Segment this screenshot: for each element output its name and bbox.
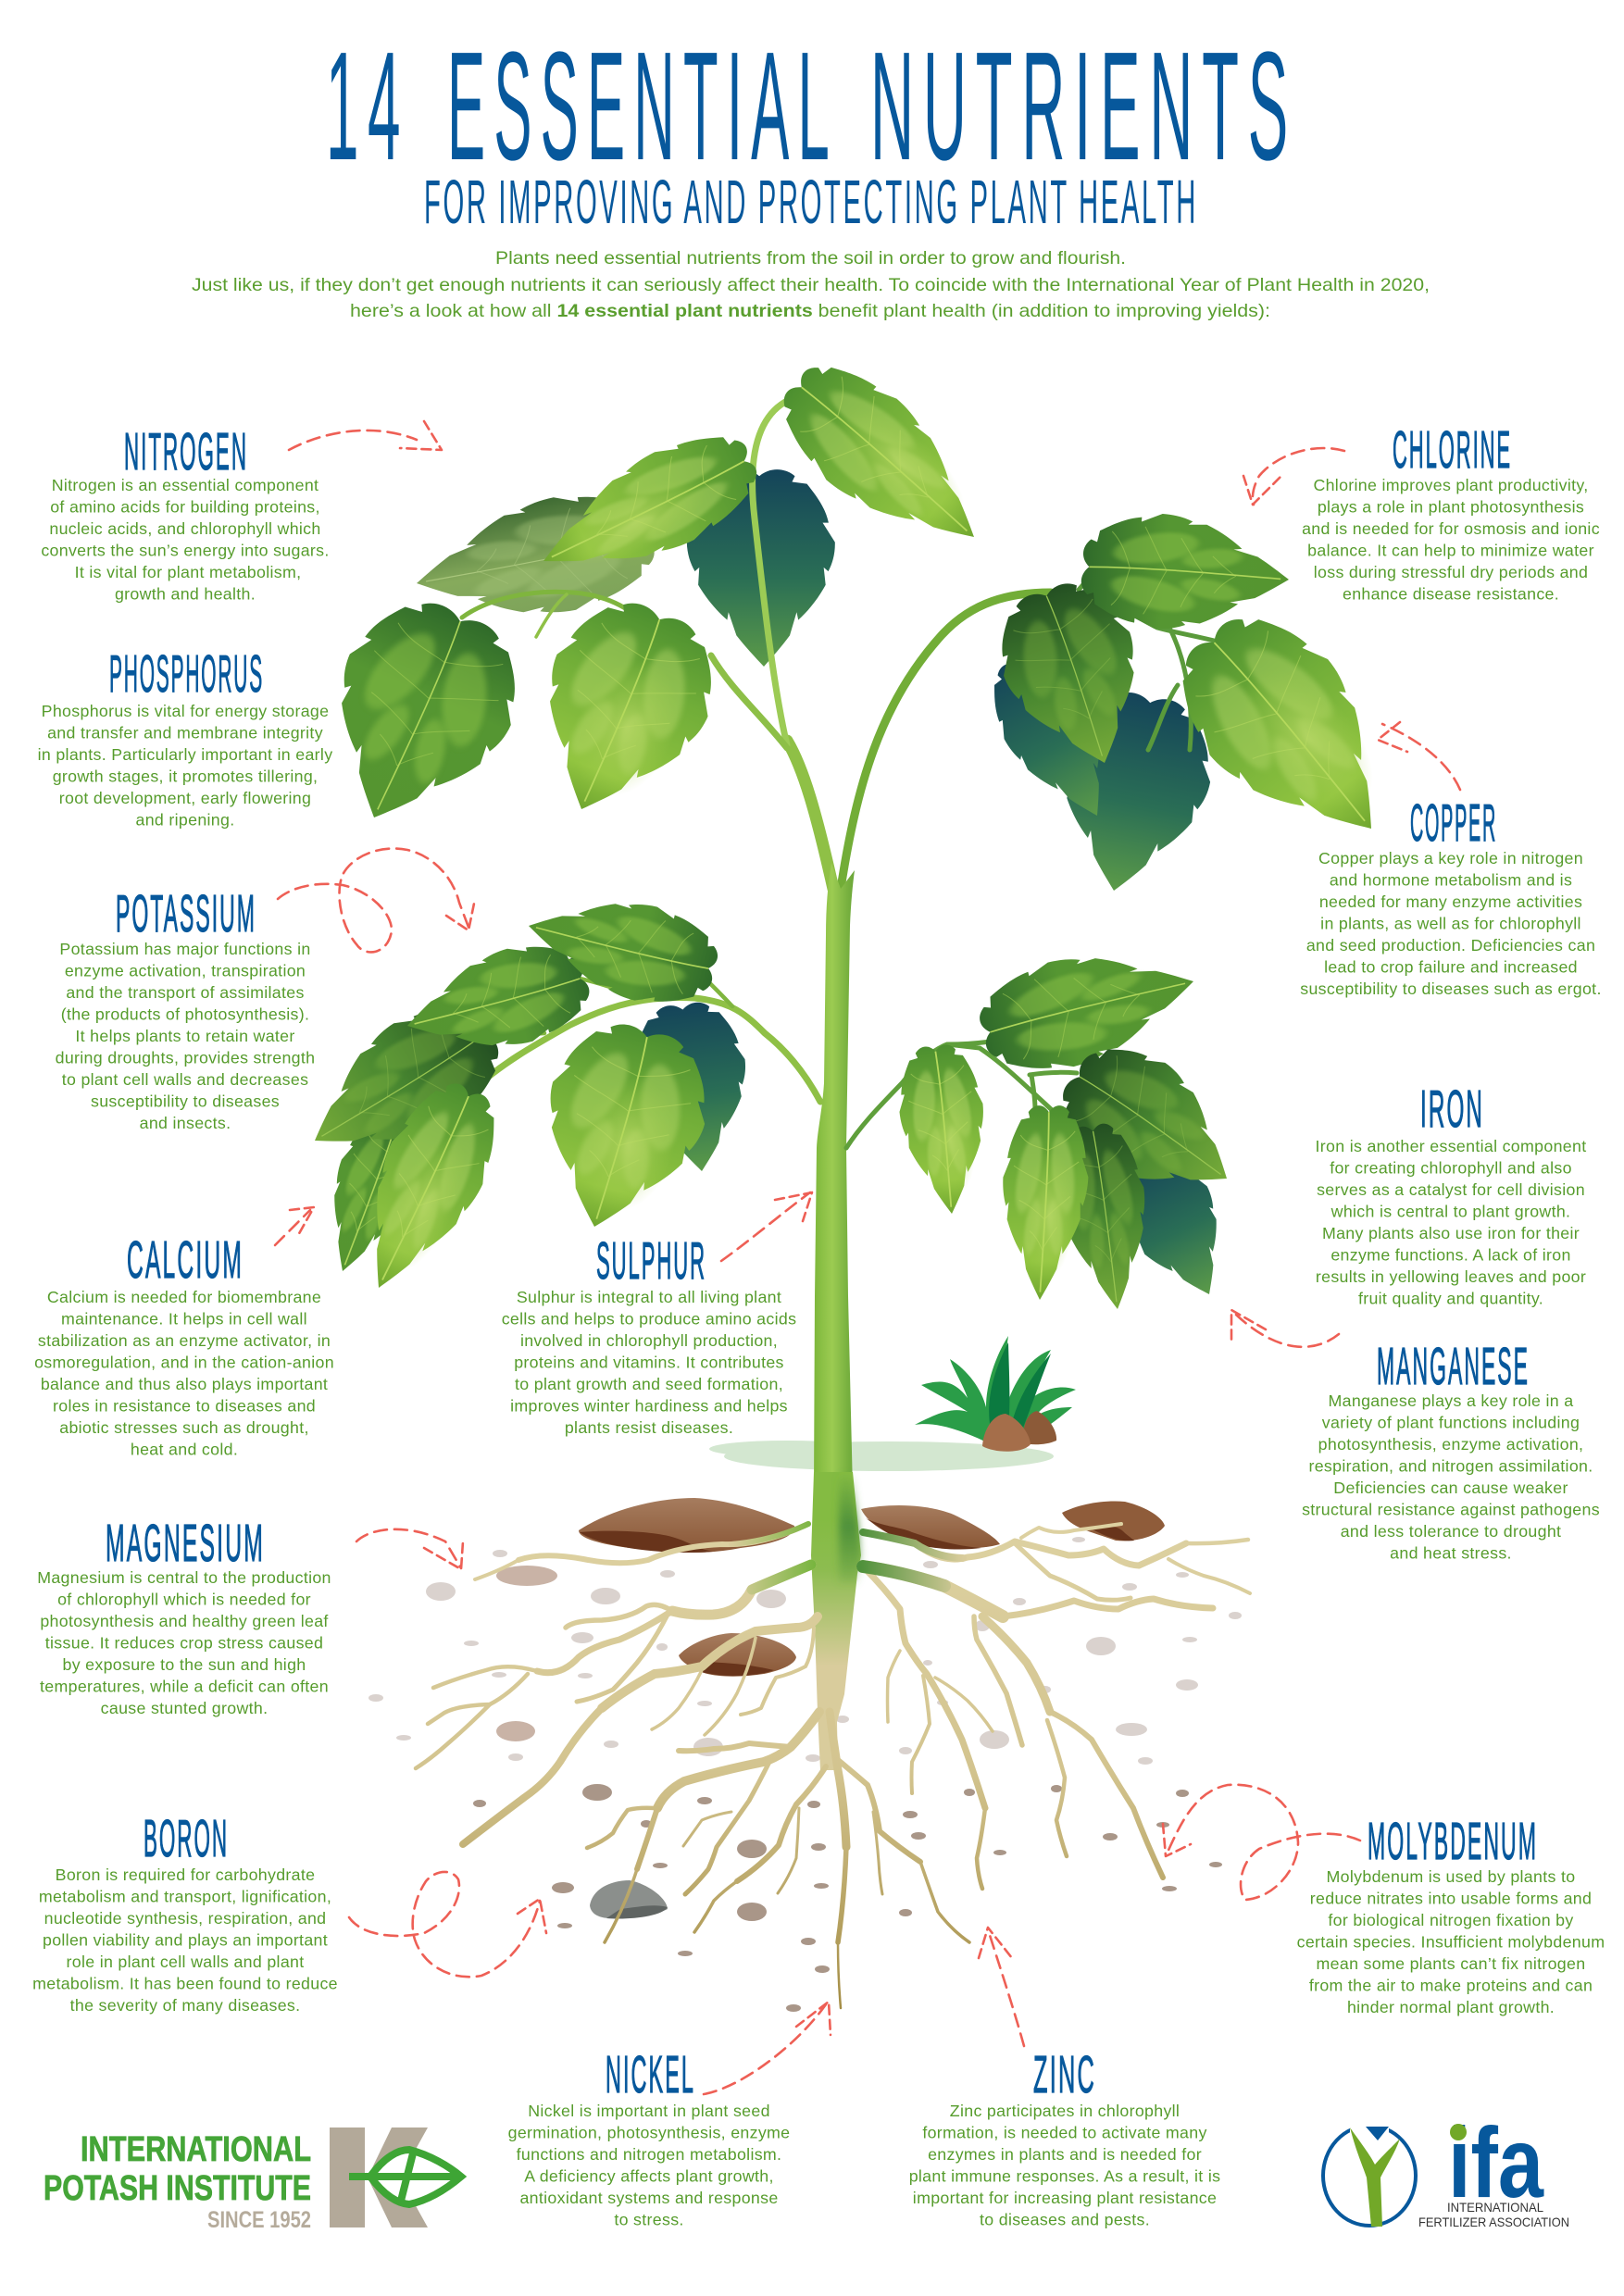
block: calcium: stabilization as an enzyme activator, in	[38, 1331, 331, 1350]
block: manganese: variety of plant functions including	[1322, 1413, 1580, 1431]
arrow: magnesium	[356, 1529, 463, 1569]
block: potassium: and the transport of assimilates	[66, 983, 305, 1002]
block: copper: needed for many enzyme activities	[1319, 892, 1582, 911]
block: potassium: POTASSIUM	[116, 884, 256, 943]
block: zinc	[909, 2045, 1220, 2229]
block: zinc: plant immune responses. As a result, it is	[909, 2166, 1220, 2185]
block: boron: metabolism and transport, lignification,	[39, 1887, 331, 1905]
block: molybdenum: from the air to make proteins and can	[1309, 1976, 1593, 1994]
block: magnesium: tissue. It reduces crop stress caused	[45, 1633, 323, 1652]
block: boron: role in plant cell walls and plant	[67, 1953, 304, 1971]
block: nickel: to stress.	[614, 2211, 684, 2229]
block: potassium	[56, 884, 315, 1132]
main stem	[814, 863, 855, 1491]
block: sulphur: to plant growth and seed formation,	[515, 1375, 783, 1393]
grey rock	[590, 1880, 668, 1918]
block: chlorine	[1302, 420, 1600, 604]
block: iron: which is central to plant growth.	[1330, 1202, 1570, 1220]
arrow: sulphur	[721, 1192, 812, 1261]
block: phosphorus: and ripening.	[136, 811, 234, 830]
logo: international fertilizer association: INTERNATIONAL	[1447, 2200, 1543, 2215]
block: boron: the severity of many diseases.	[70, 1996, 300, 2015]
back leaves upper	[406, 469, 1224, 905]
block: calcium: osmoregulation, and in the cation-anion	[34, 1354, 334, 1372]
block: calcium: balance and thus also plays important	[41, 1375, 328, 1393]
block: sulphur: Sulphur is integral to all living plant	[517, 1288, 781, 1306]
block: phosphorus: growth stages, it promotes tillering,	[53, 767, 318, 785]
arrow: chlorine	[1243, 448, 1344, 505]
leaves upper cluster	[294, 342, 1430, 877]
block: potassium: and insects.	[140, 1114, 231, 1132]
block: potassium: susceptibility to diseases	[91, 1092, 280, 1111]
block: magnesium: Magnesium is central to the production	[37, 1568, 331, 1587]
block: iron: fruit quality and quantity.	[1358, 1289, 1543, 1307]
block: magnesium: MAGNESIUM	[106, 1514, 265, 1573]
intro text	[192, 248, 1430, 321]
block: zinc: formation, is needed to activate many	[922, 2124, 1207, 2142]
block: boron: metabolism. It has been found to reduce	[32, 1974, 338, 1992]
block: sulphur	[502, 1231, 796, 1437]
block: potassium: enzyme activation, transpiration	[65, 961, 306, 980]
title: 14	[326, 20, 409, 193]
block: iron: Many plants also use iron for their	[1322, 1224, 1580, 1242]
block: magnesium	[37, 1514, 331, 1717]
block: nickel	[508, 2045, 790, 2229]
block: boron: Boron is required for carbohydrate	[56, 1866, 315, 1884]
block: nitrogen: converts the sun’s energy into sugars.	[41, 541, 330, 559]
block: manganese: respiration, and nitrogen assimilation.	[1308, 1457, 1593, 1476]
block: potassium: Potassium has major functions in	[59, 940, 311, 958]
arrow: boron	[349, 1872, 546, 1977]
block: zinc: important for increasing plant resistance	[913, 2189, 1217, 2207]
brown stones	[579, 1498, 1165, 1677]
block: phosphorus: root development, early flowering	[59, 789, 311, 807]
arrow: iron	[1231, 1310, 1339, 1347]
block: magnesium: of chlorophyll which is needed for	[57, 1591, 311, 1609]
block: nitrogen: growth and health.	[115, 585, 256, 604]
block: boron: pollen viability and plays an important	[43, 1931, 328, 1950]
block: zinc: to diseases and pests.	[980, 2211, 1150, 2229]
block: manganese: and less tolerance to drought	[1341, 1522, 1561, 1541]
block: boron	[32, 1809, 338, 2015]
block: phosphorus	[38, 644, 332, 830]
logo: international fertilizer association	[1323, 2106, 1569, 2229]
block: nitrogen: of amino acids for building proteins,	[50, 498, 320, 517]
block: zinc: ZINC	[1033, 2045, 1096, 2104]
block: phosphorus: in plants. Particularly important in early	[38, 745, 332, 764]
roots	[416, 1524, 1250, 2008]
block: sulphur: improves winter hardiness and helps	[510, 1396, 788, 1415]
block: sulphur: proteins and vitamins. It contributes	[514, 1354, 784, 1372]
arrow: potassium	[278, 849, 475, 952]
block: copper	[1300, 793, 1602, 998]
block: manganese: photosynthesis, enzyme activation,	[1318, 1435, 1583, 1454]
block: chlorine: Chlorine improves plant productivity,	[1313, 476, 1589, 494]
block: magnesium: temperatures, while a deficit can often	[40, 1678, 329, 1696]
block: phosphorus: and transfer and membrane integrity	[47, 724, 323, 742]
block: phosphorus: Phosphorus is vital for energy storage	[42, 702, 329, 720]
intro text: Plants need essential nutrients from the soil in order to grow and flourish.	[495, 248, 1126, 268]
block: chlorine: loss during stressful dry periods and	[1314, 563, 1588, 581]
block: magnesium: photosynthesis and healthy green leaf	[40, 1612, 329, 1630]
block: nickel: functions and nitrogen metabolism.	[517, 2145, 781, 2164]
block: manganese: Deficiencies can cause weaker	[1333, 1479, 1568, 1497]
block: molybdenum	[1297, 1812, 1605, 2016]
block: copper: Copper plays a key role in nitrogen	[1318, 849, 1583, 867]
block: phosphorus: PHOSPHORUS	[109, 644, 264, 704]
block: sulphur: involved in chlorophyll production,	[520, 1331, 778, 1350]
block: chlorine: enhance disease resistance.	[1343, 585, 1559, 604]
arrow: nickel	[704, 2002, 831, 2094]
block: potassium: during droughts, provides strength	[56, 1048, 315, 1067]
block: copper: and hormone metabolism and is	[1330, 870, 1572, 889]
block: iron: enzyme functions. A lack of iron	[1330, 1246, 1571, 1265]
block: calcium: abiotic stresses such as drought,	[59, 1418, 309, 1437]
block: nitrogen: It is vital for plant metabolism,	[75, 563, 301, 581]
block: boron: BORON	[144, 1809, 229, 1868]
block: iron: Iron is another essential component	[1316, 1137, 1586, 1155]
block: calcium: Calcium is needed for biomembrane	[47, 1288, 321, 1306]
block: nickel: NICKEL	[606, 2045, 695, 2104]
block: manganese: structural resistance against pathogens	[1302, 1500, 1600, 1518]
arrow: molybdenum	[1163, 1785, 1360, 1900]
block: iron	[1316, 1079, 1586, 1307]
block: sulphur: plants resist diseases.	[565, 1418, 733, 1437]
arrow: copper	[1378, 722, 1460, 790]
block: calcium: maintenance. It helps in cell wall	[61, 1309, 307, 1328]
lower stems	[472, 956, 1083, 1153]
upper stems	[462, 400, 1241, 889]
lower stem	[811, 1472, 861, 1770]
block: nitrogen: NITROGEN	[124, 422, 248, 481]
logo: international fertilizer association: ifa	[1448, 2106, 1544, 2218]
block: iron: IRON	[1420, 1079, 1484, 1139]
logo: international potash institute: INTERNATIONAL	[81, 2130, 311, 2169]
block: molybdenum: hinder normal plant growth.	[1347, 1998, 1555, 2016]
leaves lower cluster	[284, 880, 1261, 1315]
block: copper: lead to crop failure and increased	[1324, 957, 1578, 976]
block: copper: and seed production. Deficiencies can	[1306, 936, 1595, 955]
block: molybdenum: for biological nitrogen fixation by	[1328, 1911, 1574, 1929]
arrow: calcium	[275, 1207, 314, 1245]
block: copper: in plants, as well as for chlorophyll	[1320, 915, 1581, 933]
block: magnesium: cause stunted growth.	[101, 1699, 268, 1717]
block: zinc: Zinc participates in chlorophyll	[950, 2102, 1180, 2120]
block: nickel: A deficiency affects plant growth,	[524, 2166, 774, 2185]
block: nitrogen: Nitrogen is an essential component	[52, 476, 319, 494]
intro text: here’s a look at how all 14 essential plant nutrients benefit plant health (in addition to improving yields):	[350, 301, 1270, 321]
logo: international potash institute: POTASH INSTITUTE	[44, 2169, 311, 2208]
block: copper: susceptibility to diseases such as ergot.	[1300, 980, 1602, 998]
green root starts	[731, 1524, 963, 1590]
back leaves lower	[306, 998, 1251, 1315]
block: zinc: enzymes in plants and is needed for	[928, 2145, 1202, 2164]
block: manganese: Manganese plays a key role in a	[1329, 1391, 1573, 1410]
logo: international potash institute	[44, 2128, 461, 2233]
logo: international potash institute: SINCE 1952	[207, 2207, 311, 2233]
block: calcium: roles in resistance to diseases and	[53, 1396, 316, 1415]
block: nickel: Nickel is important in plant seed	[528, 2102, 770, 2120]
soil pebbles	[369, 1537, 1242, 2012]
arrow: nitrogen	[289, 421, 442, 450]
intro text: Just like us, if they don’t get enough nutrients it can seriously affect their health. To coincide with the International Year of Plant Health in 2020,	[192, 275, 1430, 295]
block: potassium: It helps plants to retain water	[75, 1027, 295, 1045]
block: iron: serves as a catalyst for cell division	[1317, 1180, 1585, 1199]
block: calcium: heat and cold.	[131, 1441, 238, 1459]
block: manganese: and heat stress.	[1390, 1544, 1512, 1563]
block: potassium: to plant cell walls and decreases	[62, 1070, 308, 1089]
block: molybdenum: reduce nitrates into usable forms and	[1310, 1889, 1592, 1907]
ground shadow	[709, 1441, 1054, 1471]
block: chlorine: and is needed for for osmosis and ionic	[1302, 519, 1600, 538]
block: calcium	[34, 1230, 334, 1459]
grass tuft	[915, 1336, 1076, 1444]
plant illustration	[284, 342, 1430, 2012]
block: nitrogen: nucleic acids, and chlorophyll which	[49, 519, 321, 538]
block: boron: nucleotide synthesis, respiration, and	[44, 1909, 326, 1928]
block: manganese	[1302, 1337, 1600, 1563]
block: chlorine: balance. It can help to minimize water	[1307, 541, 1594, 559]
block: molybdenum: mean some plants can’t fix nitrogen	[1317, 1954, 1585, 1973]
block: magnesium: by exposure to the sun and high	[63, 1655, 306, 1674]
block: nickel: antioxidant systems and response	[519, 2189, 779, 2207]
logo: international fertilizer association: FERTILIZER ASSOCIATION	[1418, 2215, 1569, 2229]
block: calcium: CALCIUM	[127, 1230, 244, 1290]
block: molybdenum: certain species. Insufficient molybdenum	[1297, 1933, 1605, 1952]
block: iron: results in yellowing leaves and poor	[1316, 1267, 1586, 1286]
arrow: zinc	[979, 1928, 1024, 2046]
block: potassium: (the products of photosynthesis).	[61, 1005, 309, 1024]
title: ESSENTIAL	[447, 20, 838, 193]
block: chlorine: plays a role in plant photosynthesis	[1318, 498, 1584, 517]
small brown rocks	[982, 1411, 1056, 1452]
block: iron: for creating chlorophyll and also	[1330, 1159, 1572, 1178]
block: sulphur: cells and helps to produce amino acids	[502, 1309, 796, 1328]
block: nitrogen	[41, 422, 330, 604]
block: nickel: germination, photosynthesis, enzyme	[508, 2124, 790, 2142]
block: molybdenum: Molybdenum is used by plants to	[1327, 1867, 1575, 1886]
block: sulphur: SULPHUR	[596, 1231, 706, 1291]
